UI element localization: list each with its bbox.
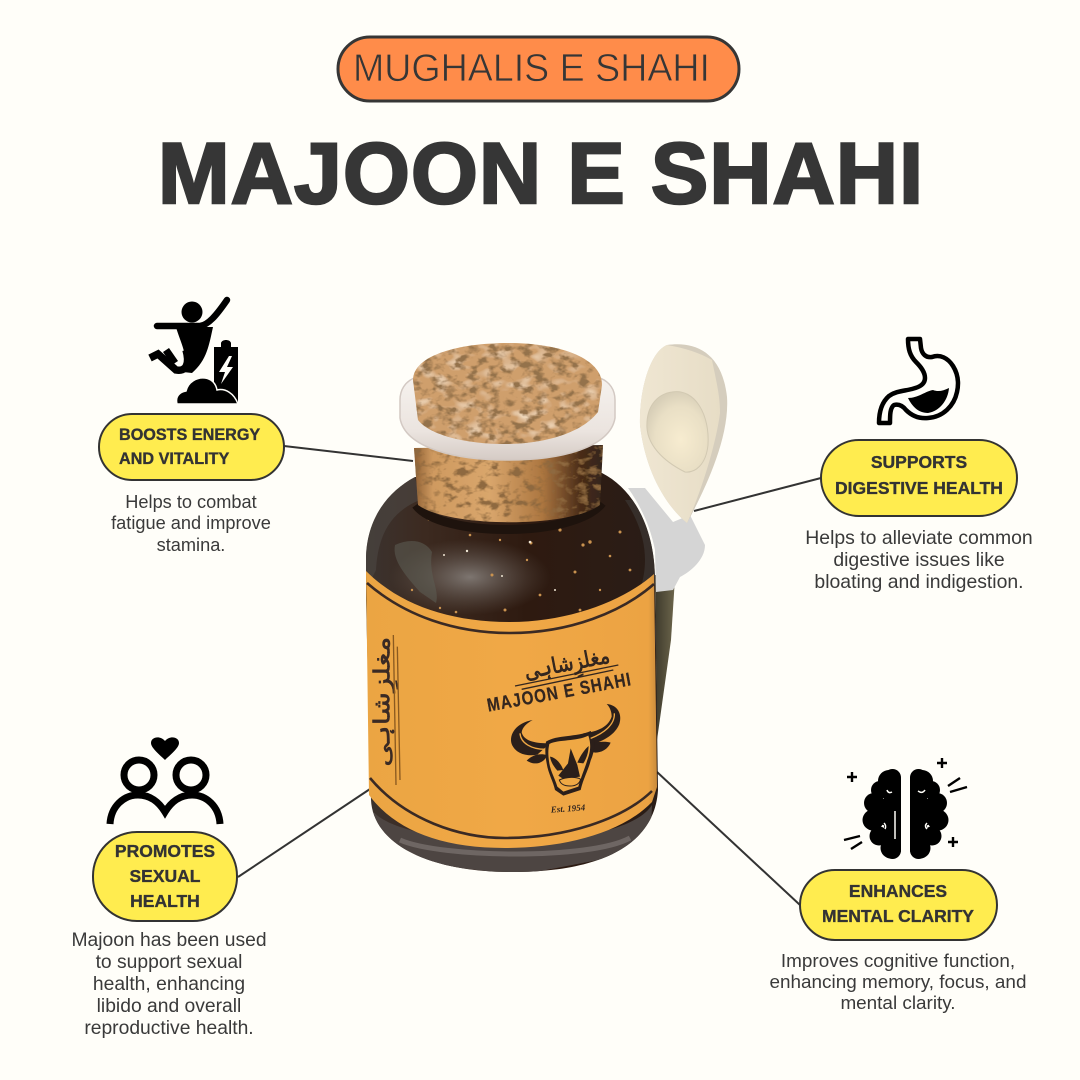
description: Majoon has been used xyxy=(71,930,267,951)
pill label: PROMOTES xyxy=(115,841,215,861)
label bands xyxy=(367,583,654,838)
pill label: SEXUAL xyxy=(130,866,201,886)
description: to support sexual xyxy=(96,952,242,973)
feature: sexual health xyxy=(71,737,267,1039)
jar label xyxy=(366,571,657,848)
vertical rules xyxy=(393,635,400,785)
description: mental clarity. xyxy=(840,993,956,1014)
pill label: HEALTH xyxy=(130,891,200,911)
description: stamina. xyxy=(157,535,225,555)
glass rim xyxy=(400,378,615,460)
description: enhancing memory, focus, and xyxy=(770,972,1026,993)
feature: boosts energy xyxy=(99,300,284,555)
description: reproductive health. xyxy=(84,1018,254,1039)
description: bloating and indigestion. xyxy=(814,571,1024,593)
jar body xyxy=(366,473,658,872)
established year: Est. 1954 xyxy=(549,802,586,815)
contents sheen and specks xyxy=(366,477,655,875)
description: Helps to combat xyxy=(125,492,257,512)
spoon xyxy=(640,344,727,523)
pill label: DIGESTIVE HEALTH xyxy=(835,478,1003,498)
pill label: ENHANCES xyxy=(849,881,947,901)
icon: brain xyxy=(844,758,967,863)
brand pill xyxy=(338,37,739,101)
pill: boosts energy xyxy=(99,414,284,480)
description: Helps to alleviate common xyxy=(805,527,1033,549)
title: MAJOON E SHAHI xyxy=(158,126,923,222)
bull logo xyxy=(511,704,620,796)
connector lines xyxy=(238,446,821,905)
pill label: SUPPORTS xyxy=(871,452,967,472)
cork plug in neck xyxy=(414,445,603,522)
product name on label: MAJOON E SHAHI xyxy=(485,668,633,716)
pill: digestive health xyxy=(821,440,1017,516)
icon: couple with heart xyxy=(110,737,220,824)
icon: jumping person and battery xyxy=(150,300,238,404)
vertical Urdu text: مغلزِشاہی xyxy=(369,637,399,767)
pill label: AND VITALITY xyxy=(119,450,230,468)
description: Improves cognitive function, xyxy=(781,951,1015,972)
brand name: MUGHALIS E SHAHI xyxy=(353,47,710,90)
description: fatigue and improve xyxy=(111,513,271,533)
description: health, enhancing xyxy=(93,974,245,995)
pill: mental clarity xyxy=(800,870,997,940)
feature: digestive health xyxy=(805,339,1033,593)
pill: sexual health xyxy=(93,832,237,921)
spoon handle xyxy=(655,575,675,740)
spoon holder xyxy=(628,488,705,592)
label artwork xyxy=(369,635,633,815)
description: digestive issues like xyxy=(833,549,1005,571)
underlines xyxy=(515,665,618,689)
feature: mental clarity xyxy=(770,758,1026,1014)
pill label: MENTAL CLARITY xyxy=(822,906,974,926)
pill label: BOOSTS ENERGY xyxy=(119,426,260,444)
cork stopper xyxy=(413,343,602,444)
Urdu name: مغلزِشاہی xyxy=(522,644,612,687)
description: libido and overall xyxy=(97,996,241,1017)
spoon bowl xyxy=(647,392,708,472)
dark ring under neck xyxy=(416,503,602,530)
icon: stomach xyxy=(879,339,958,423)
product jar xyxy=(366,343,727,875)
